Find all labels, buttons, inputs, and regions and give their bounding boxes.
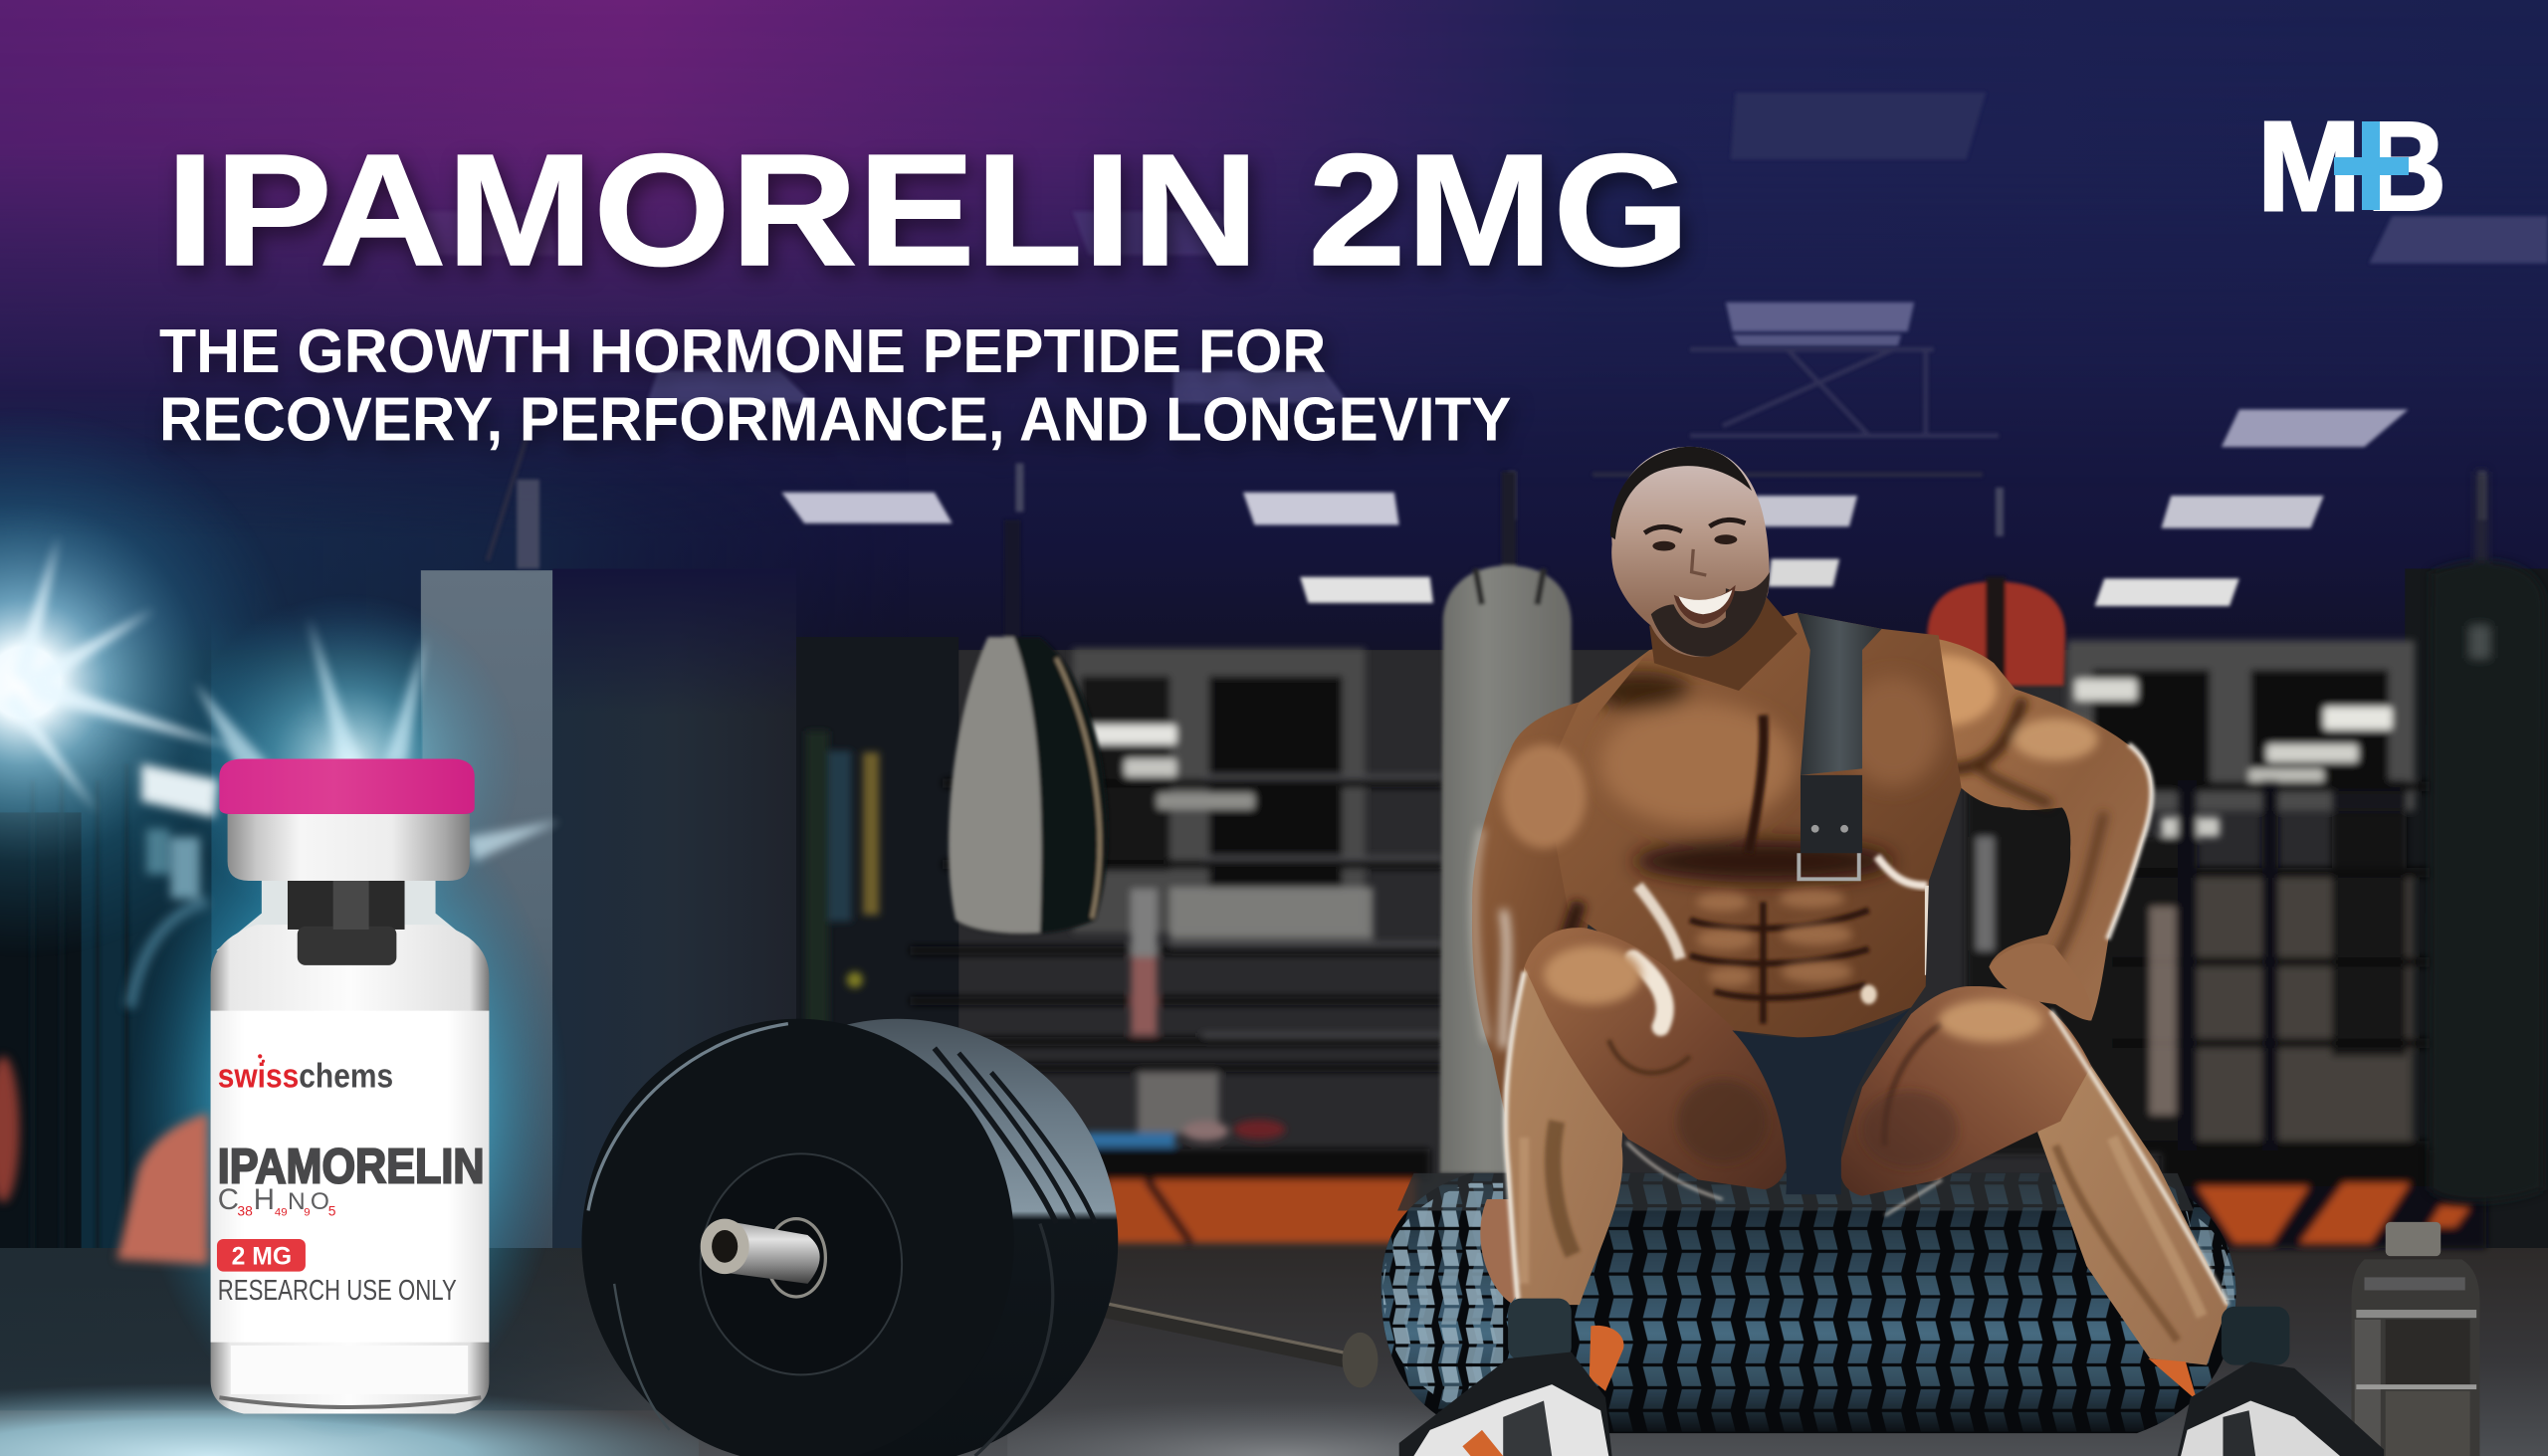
subtitle: THE GROWTH HORMONE PEPTIDE FOR <box>159 317 1326 386</box>
torso <box>1544 613 1962 1040</box>
barbell: weight plates <box>581 1019 1118 1456</box>
chemical formula: 49 <box>275 1206 288 1218</box>
chemical formula: H <box>254 1183 275 1216</box>
subtitle: RECOVERY, PERFORMANCE, AND LONGEVITY <box>159 385 1511 454</box>
torso muscle shading <box>1592 671 1942 1024</box>
flask mark <box>258 1054 265 1063</box>
rubber stopper <box>288 881 405 965</box>
plate front face <box>581 1019 1014 1456</box>
chemical formula: 5 <box>328 1202 336 1218</box>
chemical formula: 38 <box>237 1202 253 1218</box>
vial <box>211 759 489 1414</box>
heavy bag: left <box>949 520 1108 935</box>
chemical formula: O <box>311 1188 329 1215</box>
dose badge <box>217 1239 306 1272</box>
vial glass body <box>211 925 489 1414</box>
background details, left <box>0 763 218 1264</box>
heavy bag: dark right <box>2430 472 2545 1201</box>
pink cap <box>219 759 475 814</box>
right shoe <box>2148 1307 2384 1456</box>
ceiling trusses <box>488 349 1999 560</box>
subtitle <box>159 317 1511 454</box>
gym windows and shelving, right <box>1967 640 2486 1248</box>
logo: B <box>2367 96 2446 238</box>
heavy bag: red <box>1927 577 2065 688</box>
dose badge: 2 MG <box>232 1242 292 1270</box>
light flash and vial glow <box>0 406 568 1438</box>
logo <box>2257 96 2446 238</box>
water bottle <box>2351 1222 2479 1456</box>
chemical formula: 9 <box>304 1206 311 1218</box>
brand name: swisschems <box>218 1057 393 1095</box>
barbell: bar <box>1105 1304 1378 1387</box>
vial neck <box>216 881 481 950</box>
heavy bag: white <box>1440 472 1572 1173</box>
gym windows and shelving, centre <box>806 648 1443 1243</box>
right hand <box>1989 943 2092 1020</box>
bodybuilder <box>1399 447 2384 1456</box>
shorts <box>1732 1007 1911 1194</box>
chemical formula: C <box>218 1183 239 1216</box>
logo: M <box>2257 96 2361 238</box>
neck <box>1649 593 1798 691</box>
leg highlights and veins <box>1506 958 2228 1341</box>
research disclaimer: RESEARCH USE ONLY <box>218 1275 457 1307</box>
ceiling lights and panels <box>426 93 2548 606</box>
title: IPAMORELIN 2MG <box>166 120 1690 299</box>
arm muscle shading <box>1887 655 2104 967</box>
chemical formula: N <box>288 1188 306 1215</box>
left thigh <box>1524 928 1790 1189</box>
product name: IPAMORELIN <box>218 1141 485 1194</box>
chemical formula <box>218 1183 336 1218</box>
silver crimp <box>228 814 470 881</box>
belt strap and buckle <box>1798 613 1882 879</box>
vial label <box>211 1011 489 1343</box>
floor <box>0 1248 2548 1456</box>
left shoe <box>1399 1299 1623 1456</box>
left shin <box>1505 967 1628 1305</box>
barbell sleeve <box>767 1219 825 1297</box>
hand near tire <box>1480 1199 1536 1304</box>
left arm <box>1472 702 1612 1130</box>
right arm <box>1873 637 2152 1020</box>
left arm shading <box>1474 744 1586 1048</box>
right shin <box>2037 1007 2228 1365</box>
head <box>1610 447 1770 657</box>
right thigh <box>1840 986 2091 1196</box>
tire with tread <box>1381 1173 2236 1433</box>
